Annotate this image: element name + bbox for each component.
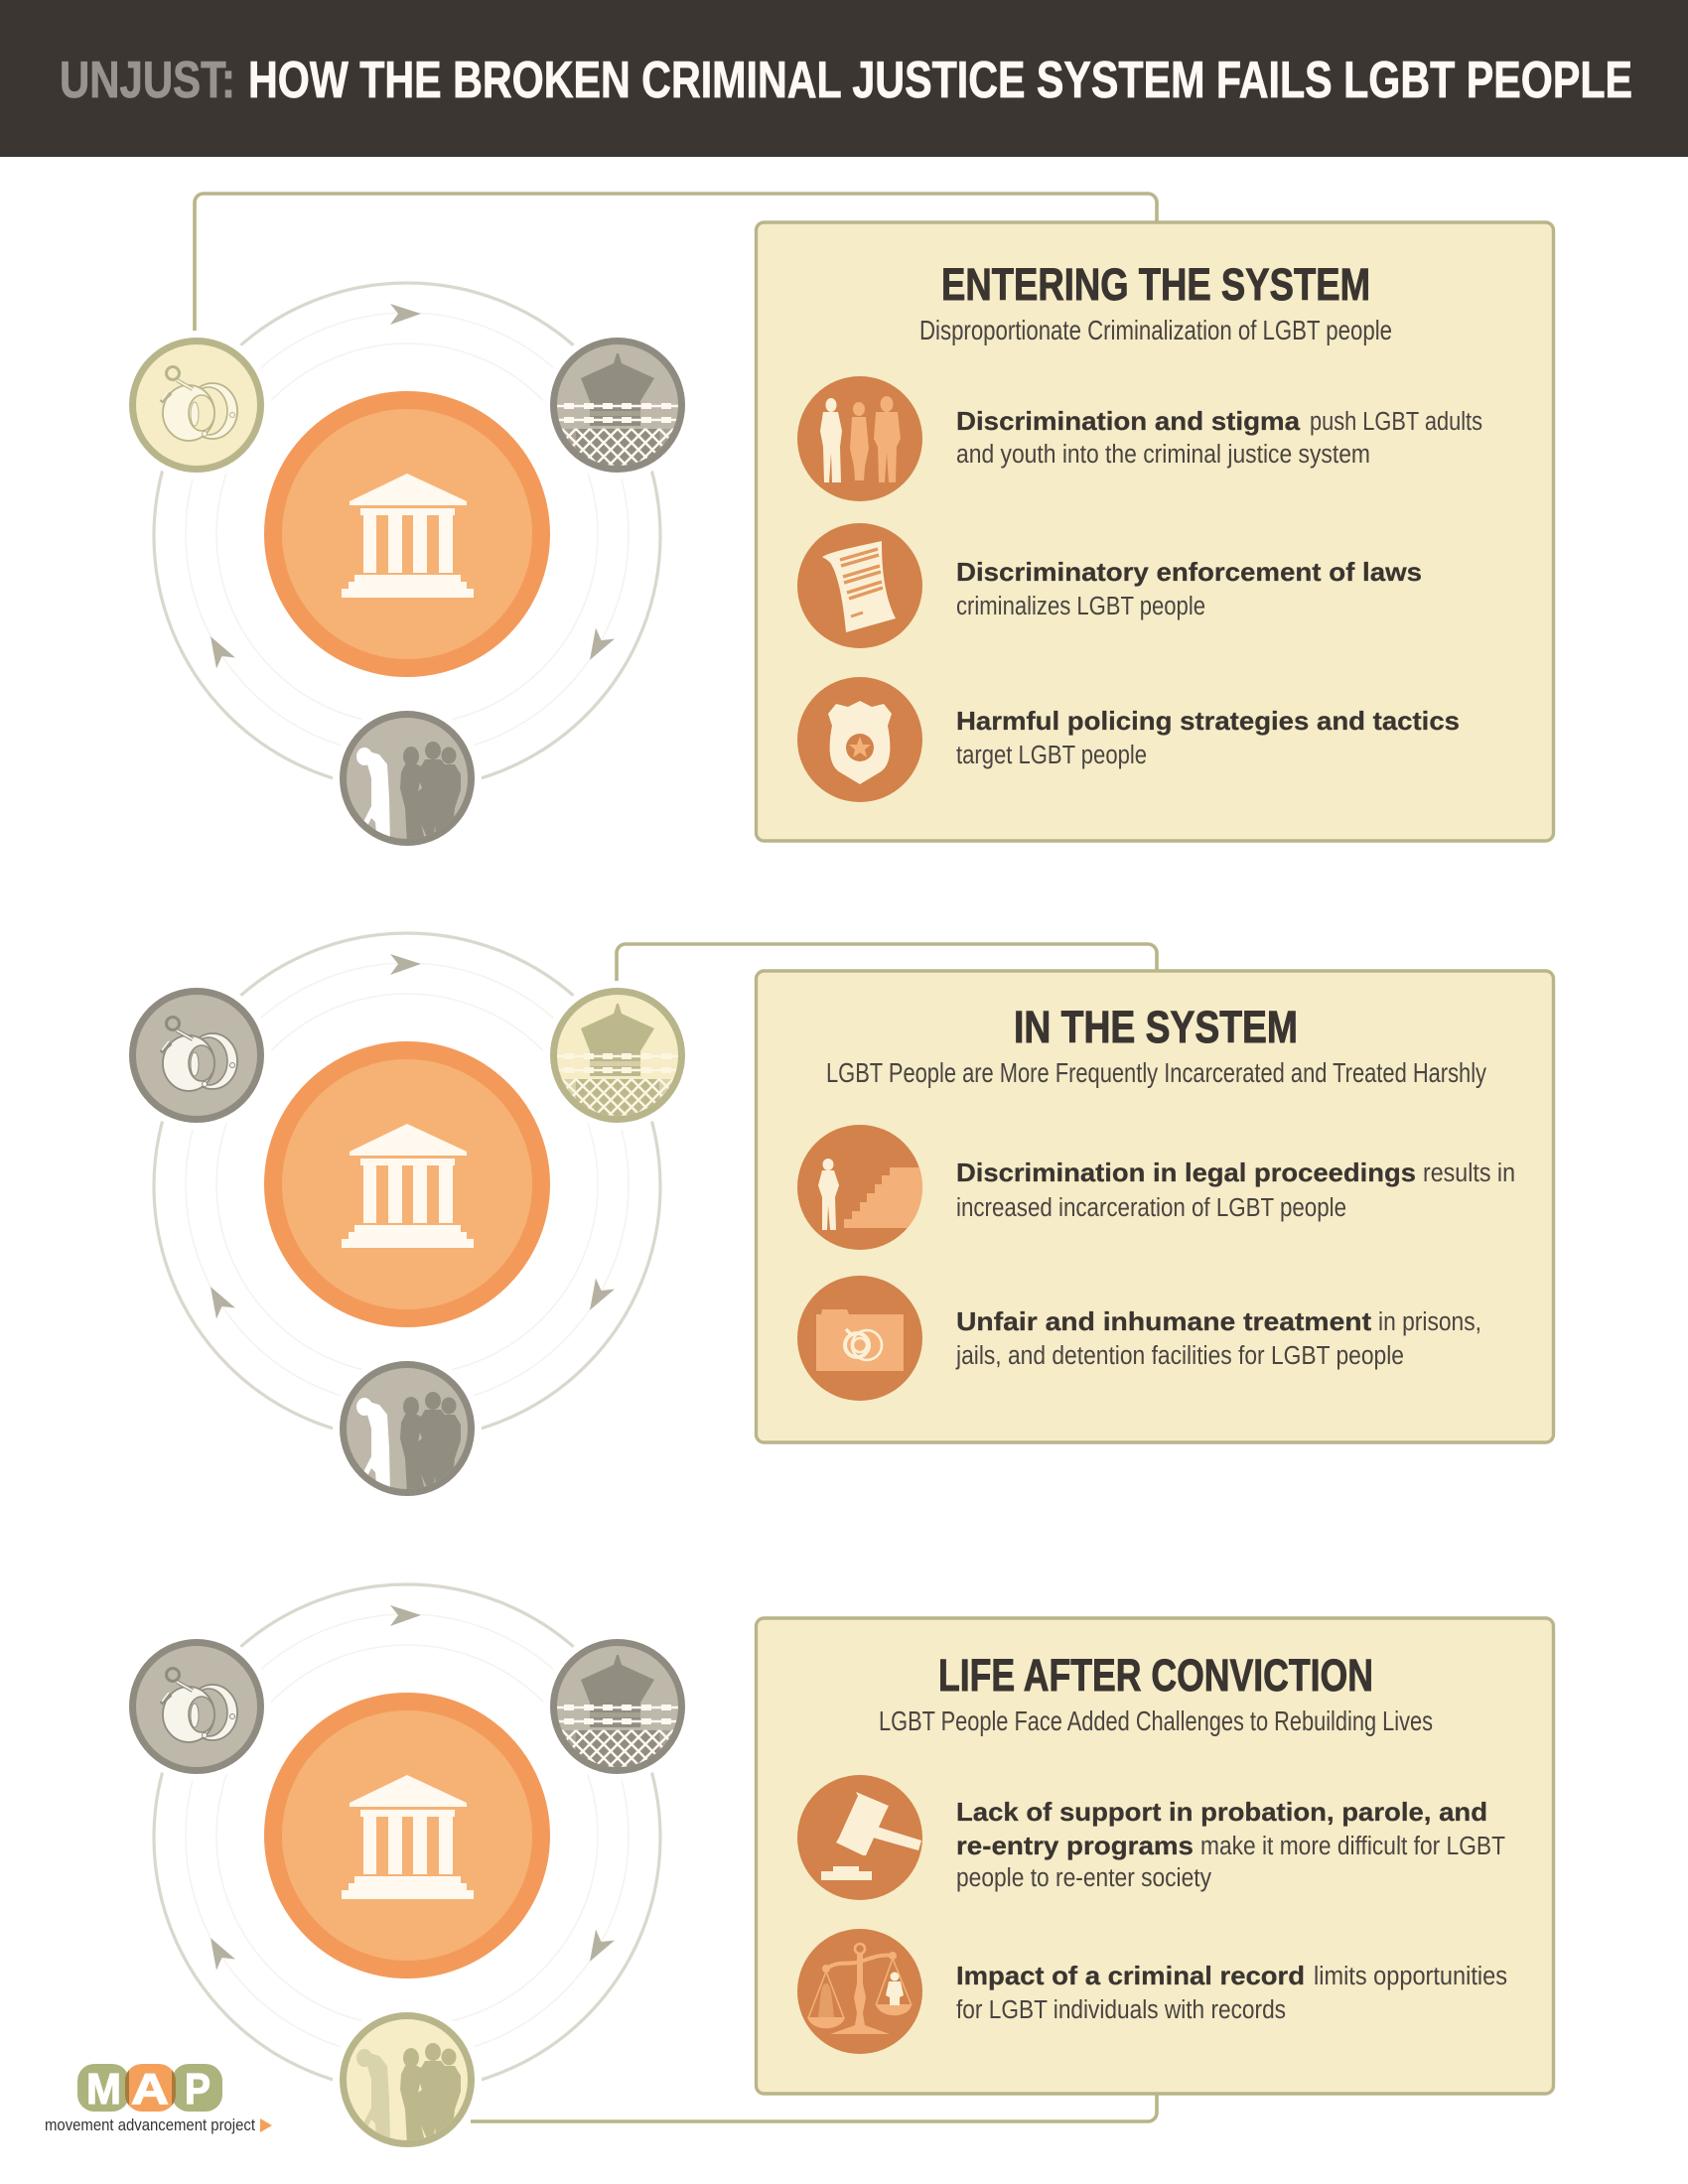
- cycle diagram 3: life after conviction: [122, 1584, 1157, 2154]
- center: courthouse: [273, 400, 541, 668]
- node: people: [333, 704, 482, 853]
- cycle diagram 1: entering the system: [122, 194, 1157, 853]
- node: people: [333, 1354, 482, 1503]
- text: lack of support: Lack of support in probation, parole, and: [956, 1797, 1487, 1827]
- text: discrimination and stigma: Discrimination and stigma: [956, 406, 1301, 436]
- node: people highlighted: [333, 2005, 482, 2154]
- text: lack of support: [956, 1797, 1505, 1892]
- panel: entering the system: [757, 222, 1553, 841]
- text: impact of a criminal record: [956, 1961, 1507, 2024]
- text: discrimination and stigma: and youth into the criminal justice system: [956, 441, 1370, 469]
- icon: scales of justice: [797, 1929, 922, 2054]
- node: handcuffs: [122, 1632, 271, 1781]
- text: legal proceedings: [956, 1158, 1515, 1222]
- node: prison tower: [512, 331, 723, 479]
- text: unfair and inhumane treatment: jails, and detention facilities for LGBT people: [955, 1342, 1404, 1370]
- text: legal proceedings: increased incarceration of LGBT people: [956, 1194, 1346, 1222]
- text: discrimination and stigma: [956, 406, 1482, 469]
- cycle diagram 2: in the system: [122, 933, 1157, 1503]
- subheading: LGBT People Face Added Challenges to Rebuilding Lives: [879, 1706, 1433, 1736]
- subheading: LGBT People are More Frequently Incarcerated and Treated Harshly: [826, 1057, 1486, 1088]
- text: unfair and inhumane treatment: [955, 1306, 1481, 1370]
- icon: stairs and person: [797, 1125, 929, 1250]
- text: harmful policing: Harmful policing strategies and tactics: [956, 706, 1460, 736]
- center: courthouse: [273, 1050, 541, 1318]
- title: UNJUST:: [60, 52, 235, 109]
- text: harmful policing: target LGBT people: [956, 742, 1147, 769]
- text: discriminatory enforcement: Discriminatory enforcement of laws: [956, 557, 1422, 587]
- heading: IN THE SYSTEM: [1014, 1002, 1298, 1052]
- text: lack of support: make it more difficult for LGBT: [1200, 1833, 1505, 1860]
- node: handcuffs highlighted: [122, 331, 271, 479]
- logo: movement advancement project: P: [185, 2065, 211, 2114]
- panel: in the system: [757, 971, 1553, 1442]
- text: unfair and inhumane treatment: Unfair and inhumane treatment: [956, 1306, 1371, 1336]
- icon: people: [797, 376, 922, 501]
- text: lack of support: people to re-enter society: [956, 1864, 1211, 1892]
- text: legal proceedings: results in: [1423, 1160, 1515, 1187]
- text: discrimination and stigma: push LGBT adults: [1310, 408, 1482, 436]
- logo: movement advancement project: movement advancement project: [45, 2116, 255, 2134]
- text: unfair and inhumane treatment: in prisons,: [1378, 1308, 1481, 1336]
- text: legal proceedings: Discrimination in legal proceedings: [956, 1158, 1416, 1187]
- icon: scroll: [797, 523, 922, 648]
- connector line to panel 3: [471, 2094, 1157, 2121]
- heading: ENTERING THE SYSTEM: [941, 259, 1370, 310]
- icon: police badge: [797, 677, 922, 802]
- text: discriminatory enforcement: [956, 557, 1422, 620]
- text: impact of a criminal record: for LGBT individuals with records: [956, 1996, 1286, 2024]
- text: discriminatory enforcement: criminalizes LGBT people: [956, 593, 1205, 620]
- node: handcuffs: [122, 981, 271, 1130]
- text: lack of support: re-entry programs: [956, 1831, 1194, 1860]
- logo: movement advancement project: [45, 2064, 272, 2134]
- icon: gavel: [797, 1775, 922, 1900]
- subheading: Disproportionate Criminalization of LGBT people: [919, 315, 1392, 345]
- connector line to panel 2: [617, 944, 1157, 991]
- node: prison tower: [512, 1632, 723, 1781]
- icon: folder and handcuffs: [797, 1276, 922, 1401]
- connector line to panel 1: [195, 194, 1157, 340]
- header banner: [0, 0, 1688, 157]
- text: impact of a criminal record: Impact of a criminal record: [956, 1961, 1305, 1990]
- text: impact of a criminal record: limits opportunities: [1314, 1963, 1507, 1990]
- logo: movement advancement project: A: [131, 2065, 169, 2114]
- center: courthouse: [273, 1702, 541, 1970]
- logo: movement advancement project: M: [86, 2065, 121, 2114]
- heading: LIFE AFTER CONVICTION: [938, 1650, 1373, 1701]
- text: harmful policing: [956, 706, 1460, 769]
- node: prison tower highlighted: [512, 981, 723, 1130]
- panel: life after conviction: [757, 1618, 1553, 2094]
